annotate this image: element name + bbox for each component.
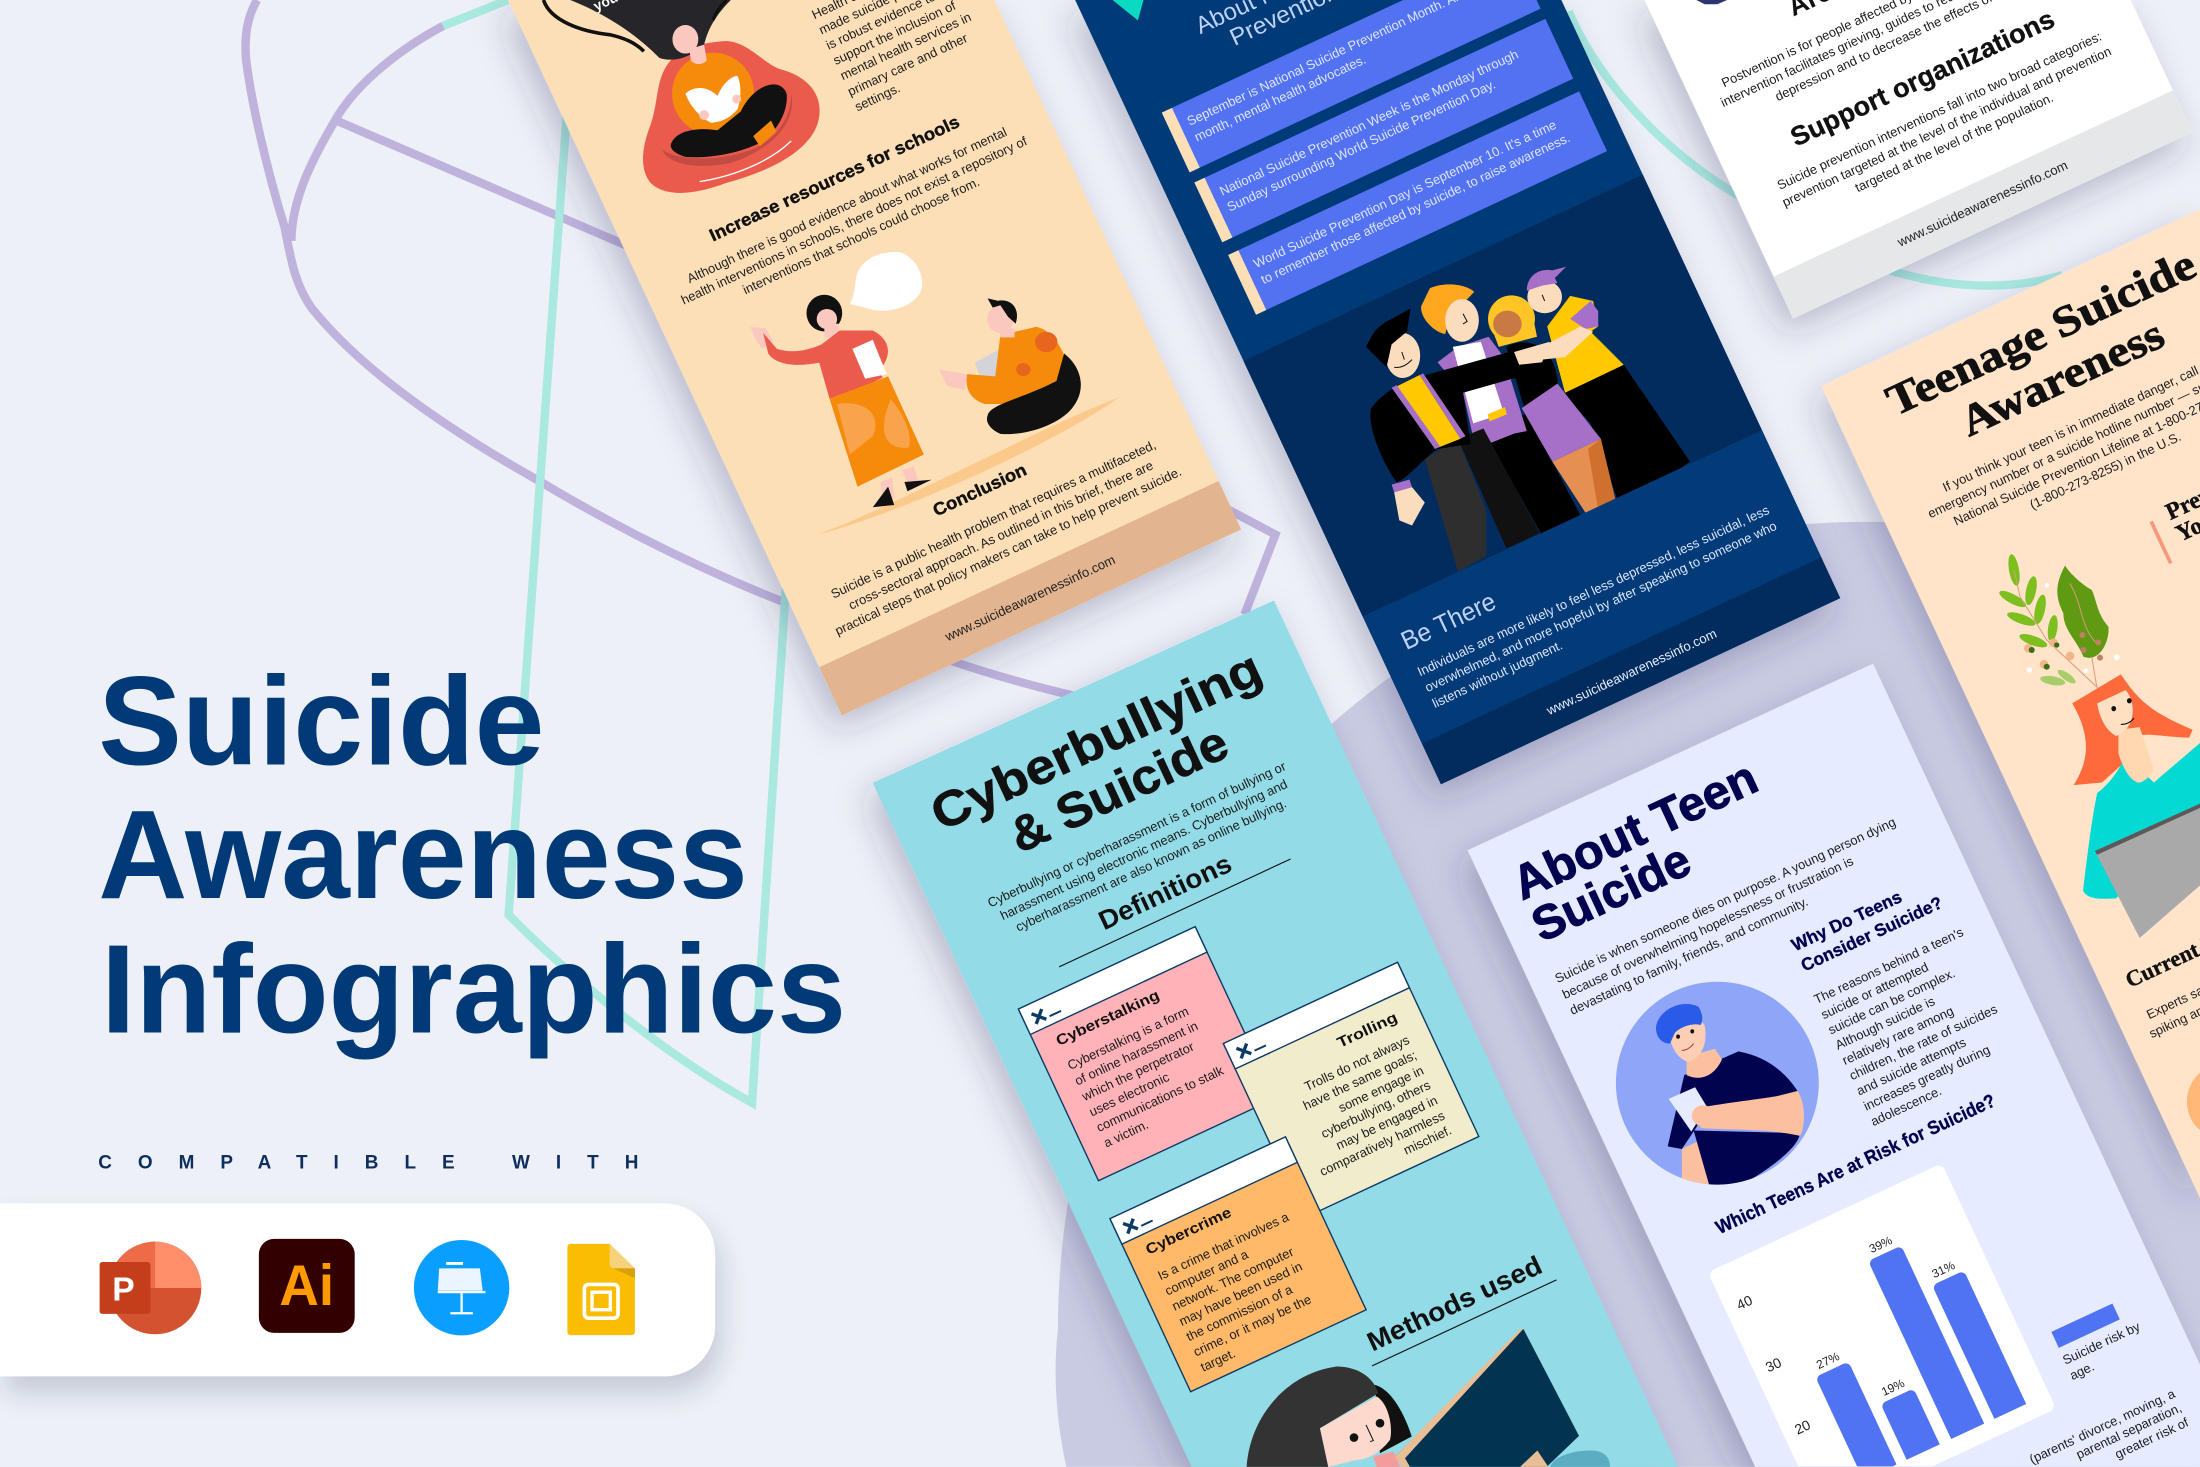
illustration: group of four friends [1366,267,1690,571]
window: cyberstalking [1018,927,1275,1181]
window: trolling: mischief. [1401,1122,1454,1158]
panel: peach policy recommendations [508,0,1241,716]
bars [1817,1247,2026,1466]
heading: why do teens: Consider Suicide? [1798,892,1946,975]
subtitle: compatible with: COMPATIBLE WITH [98,1153,638,1174]
bar labels: 31% [1930,1258,1957,1281]
text: health services: mental health services in [838,9,974,83]
window: cybercrime [1110,1137,1366,1392]
heading: cyberbullying and suicide: Cyberbullying [923,641,1270,841]
text: interventions: prevention targeted at the level of the individual and prevention [1780,43,2114,210]
window: cybercrime: computer and a [1162,1246,1251,1298]
illustration: woman with laptop [2072,674,2200,1137]
illustration: woman reading on a red blob [543,0,820,193]
window: cybercrime: the commission of a [1184,1281,1295,1344]
window: cybercrime: Cybercrime [1143,1205,1234,1259]
text: reasons: The reasons behind a teen's [1811,924,1966,1007]
window: trolling: may be engaged in [1334,1093,1440,1153]
window: trolling: have the same goals; [1301,1047,1419,1113]
heading: definitions: Definitions [1094,848,1236,936]
icon: Illustrator [259,1239,355,1333]
text: be there paragraph: listens without judgment. [1430,637,1565,711]
text: reasons: children, the rate of suicides [1847,1001,2000,1083]
window: cyberstalking: Cyberstalking [1054,988,1162,1050]
heading: be there: Be There [1397,588,1500,656]
window: trolling: cyberbullying, others [1319,1077,1433,1141]
y axis labels: 30 [1763,1354,1784,1375]
text: intro: cyberharassment are also known as online bullying. [1013,795,1289,934]
heading: which teens: Which Teens Are at Risk for Suicide? [1713,1091,1999,1239]
illustration: girl with a blackboard [1247,1329,1610,1467]
heading: cyberbullying and suicide: & Suicide [1001,716,1237,864]
window: cybercrime: Is a crime that involves a [1155,1209,1292,1283]
text: conclusion paragraph: cross-sectoral approach. As outlined in this brief, there are [846,458,1155,613]
icon: Google Slides [567,1244,635,1335]
title: Suicide [98,651,544,792]
text: interventions: Suicide prevention interventions fall into two broad categories: [1775,29,2104,193]
title: Awareness [98,784,748,925]
text: reasons: relatively rare among [1840,1003,1956,1068]
text: reasons: and suicide attempts [1854,1034,1969,1098]
heading: conclusion: Conclusion [930,459,1030,520]
window: cyberstalking: of online harassment in [1072,1018,1200,1088]
decorative outlines: purple and teal [246,0,2063,1103]
bar labels: 27% [1814,1349,1842,1372]
heading: teenage suicide awareness: Teenage Suicide [1879,240,2200,425]
bar: world day: to remember those affected by suicide, to raise awareness. [1258,130,1572,287]
bar: september: month, mental health advocates. [1192,52,1368,145]
text: reasons [1811,924,2023,1129]
window: cybercrime: target. [1198,1345,1238,1375]
website: www.suicideawarenessinfo.com [942,552,1118,645]
illustration: two people talking [750,252,1119,535]
bar: september [1162,0,1541,172]
text: reasons: adolescence. [1868,1083,1944,1129]
heading: about teen suicide: Suicide [1524,833,1699,953]
icon: Illustrator: Ai [279,1254,334,1318]
title [98,651,846,1060]
window: cyberstalking: which the perpetrator [1079,1038,1197,1104]
heading: increase resources: Increase resources for schools [706,111,963,245]
text: intro paragraph: devastating to family, friends, and community. [1567,894,1810,1018]
window: trolling: comparatively harmless [1317,1108,1447,1179]
window: cyberstalking: uses electronic [1087,1069,1172,1119]
bar labels: 39% [1867,1233,1895,1256]
text: reasons: suicide can be complex. [1826,965,1957,1037]
window: trolling [1223,962,1479,1218]
heading: teenage suicide awareness [1879,240,2200,471]
text: schools paragraph: health interventions in schools, there does not exist a repository of [679,133,1030,307]
text: reasons: increases greatly during [1861,1042,1992,1114]
legend: Suicide risk by [2060,1319,2143,1368]
text: interventions: targeted at the level of the population. [1853,90,2056,195]
heading: about prevention [1191,0,1434,63]
text: immediate danger: (1-800-273-8255) in the U.S. [2027,429,2183,512]
legend: age. [2067,1359,2097,1383]
bar labels: 19% [1879,1376,1907,1399]
window: cybercrime: may have been used in [1177,1259,1305,1329]
y axis labels: 20 [1792,1416,1813,1438]
bar: national week: Sunday surrounding World Suicide Prevention Day. [1225,76,1498,214]
website: www.suicideawarenessinfo.com [1543,626,1719,718]
illustration: boy with phone in a circle [1616,982,1819,1189]
icon: PowerPoint [100,1242,201,1334]
panel: cyan cyberbullying [873,600,1678,1467]
text: stressors: (parents' divorce, moving, a [2027,1386,2178,1467]
window: cybercrime: network. The computer [1170,1244,1297,1314]
bar: world day: World Suicide Prevention Day is September 10. It's a time [1251,117,1559,271]
icon: teal triangle [1113,0,1143,20]
bar chart card [1710,1166,2054,1466]
heading: about teen suicide: About Teen [1504,751,1766,911]
bar labels [1779,1213,1994,1419]
y axis labels: 40 [1734,1292,1755,1313]
window: cyberstalking: communications to stalk [1094,1063,1226,1135]
heading: teenage suicide awareness: Awareness [1953,310,2171,446]
panel: peach teenage suicide awareness [1821,209,2200,1198]
text: reasons: Although suicide is [1833,993,1938,1053]
lavender background circle [1056,522,2200,1467]
accent bar [2150,521,2172,564]
text: health services: primary care and other [845,30,970,99]
text: be there paragraph: Individuals are more likely to feel less depressed, less suicidal, less [1415,502,1772,679]
bar: world day [1228,91,1607,315]
illustration: plant growing from head [1997,553,2120,690]
text: reasons: suicide or attempted [1819,959,1931,1022]
heading: cyberbullying and suicide [923,641,1292,890]
text: intro: harassment using electronic means. Cyberbullying and [998,776,1290,923]
bar: national week: National Suicide Prevention Week is the Monday through [1217,46,1521,199]
window: cyberstalking: a victim. [1101,1117,1151,1150]
text: schools paragraph: interventions that schools could choose from. [740,174,982,297]
text: stressors: greater risk of [2112,1414,2191,1462]
window: trolling: some engage in [1336,1063,1426,1115]
text: health services [809,0,999,114]
band: be there [1363,430,1821,744]
window: trolling: Trolling [1335,1010,1400,1052]
compatibility card [0,1203,715,1376]
panel: navy prevention [1075,0,1840,784]
text: conclusion paragraph: Suicide is a public health problem that requires a multifaceted, [828,437,1158,601]
legend [2050,1297,2150,1383]
heading: why do teens: Why Do Teens [1788,886,1905,955]
website: www.suicideawarenessinfo.com [1894,157,2070,250]
text: intro paragraph: Suicide is when someone dies on purpose. A young person dying [1552,814,1898,986]
window: cyberstalking: Cyberstalking is a form [1065,1003,1191,1073]
window: trolling: Trolls do not always [1302,1032,1412,1094]
icon: dark shape at top [1696,0,1727,4]
text: schools paragraph: Although there is good evidence about what works for mental [685,124,1009,286]
icon: PowerPoint: P [112,1272,135,1309]
heading: methods used: Methods used [1362,1250,1547,1357]
y axis labels [1734,1292,1813,1438]
bar: national week [1194,19,1573,242]
panel: white support organizations [1645,0,2192,318]
text: conclusion paragraph: practical steps that policy makers can take to help prevent suicide. [833,464,1184,638]
title: Infographics [101,919,846,1060]
heading: support organizations: Support organizations [1786,4,2059,152]
text: intro: Cyberbullying or cyberharassment is a form of bullying or [985,758,1289,910]
text: intro paragraph: because of overwhelming hopelessness or frustration is [1560,853,1856,1002]
text: stressors: parental separation, [2074,1400,2184,1462]
panel: lavender about teen suicide [1468,664,2200,1467]
text: be there paragraph: overwhelmed, and more hopeful by after speaking to someone who [1422,518,1779,695]
text: health services: settings. [852,80,902,114]
window: cybercrime: crime, or it may be the [1191,1292,1314,1359]
icon: Keynote [414,1240,509,1335]
